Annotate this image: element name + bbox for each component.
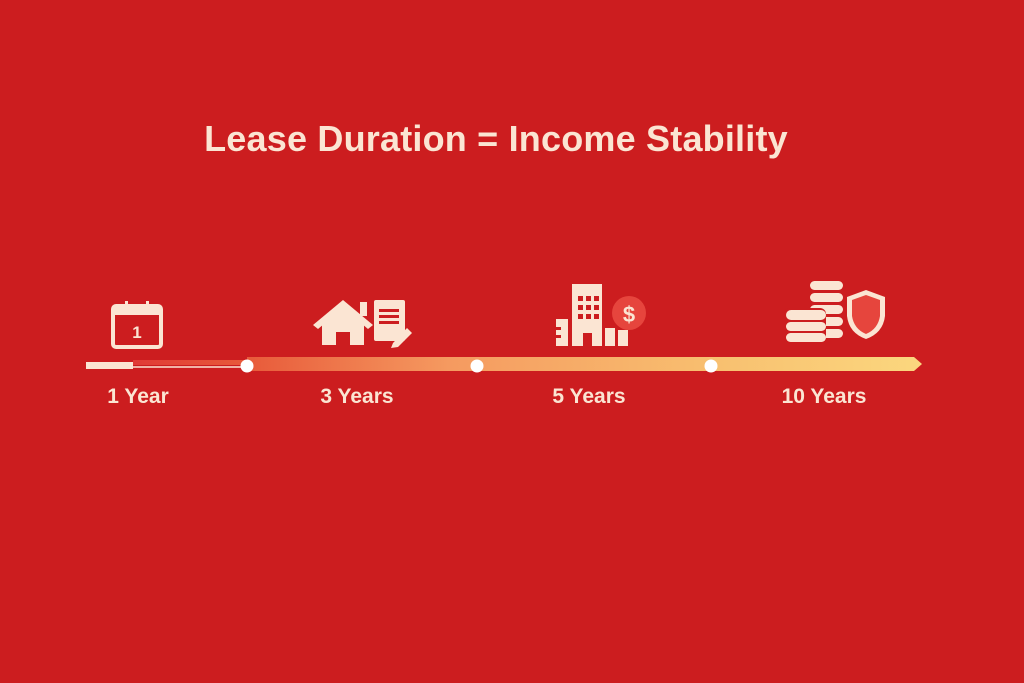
icon: house and lease	[313, 300, 412, 348]
icon: calendar: 1	[132, 323, 142, 342]
icon: calendar	[113, 301, 161, 347]
title: Lease Duration = Income Stability	[204, 118, 788, 159]
icon: building with dollar	[556, 284, 646, 346]
timeline bar	[86, 357, 922, 372]
label: 1 Year: 1 Year	[107, 385, 169, 408]
label: 3 Years: 3 Years	[320, 385, 394, 408]
icon: coins and shield	[784, 281, 885, 344]
icon: building with dollar: $	[623, 302, 635, 327]
label: 10 Years: 10 Years	[782, 385, 866, 408]
label: 5 Years: 5 Years	[552, 385, 626, 408]
